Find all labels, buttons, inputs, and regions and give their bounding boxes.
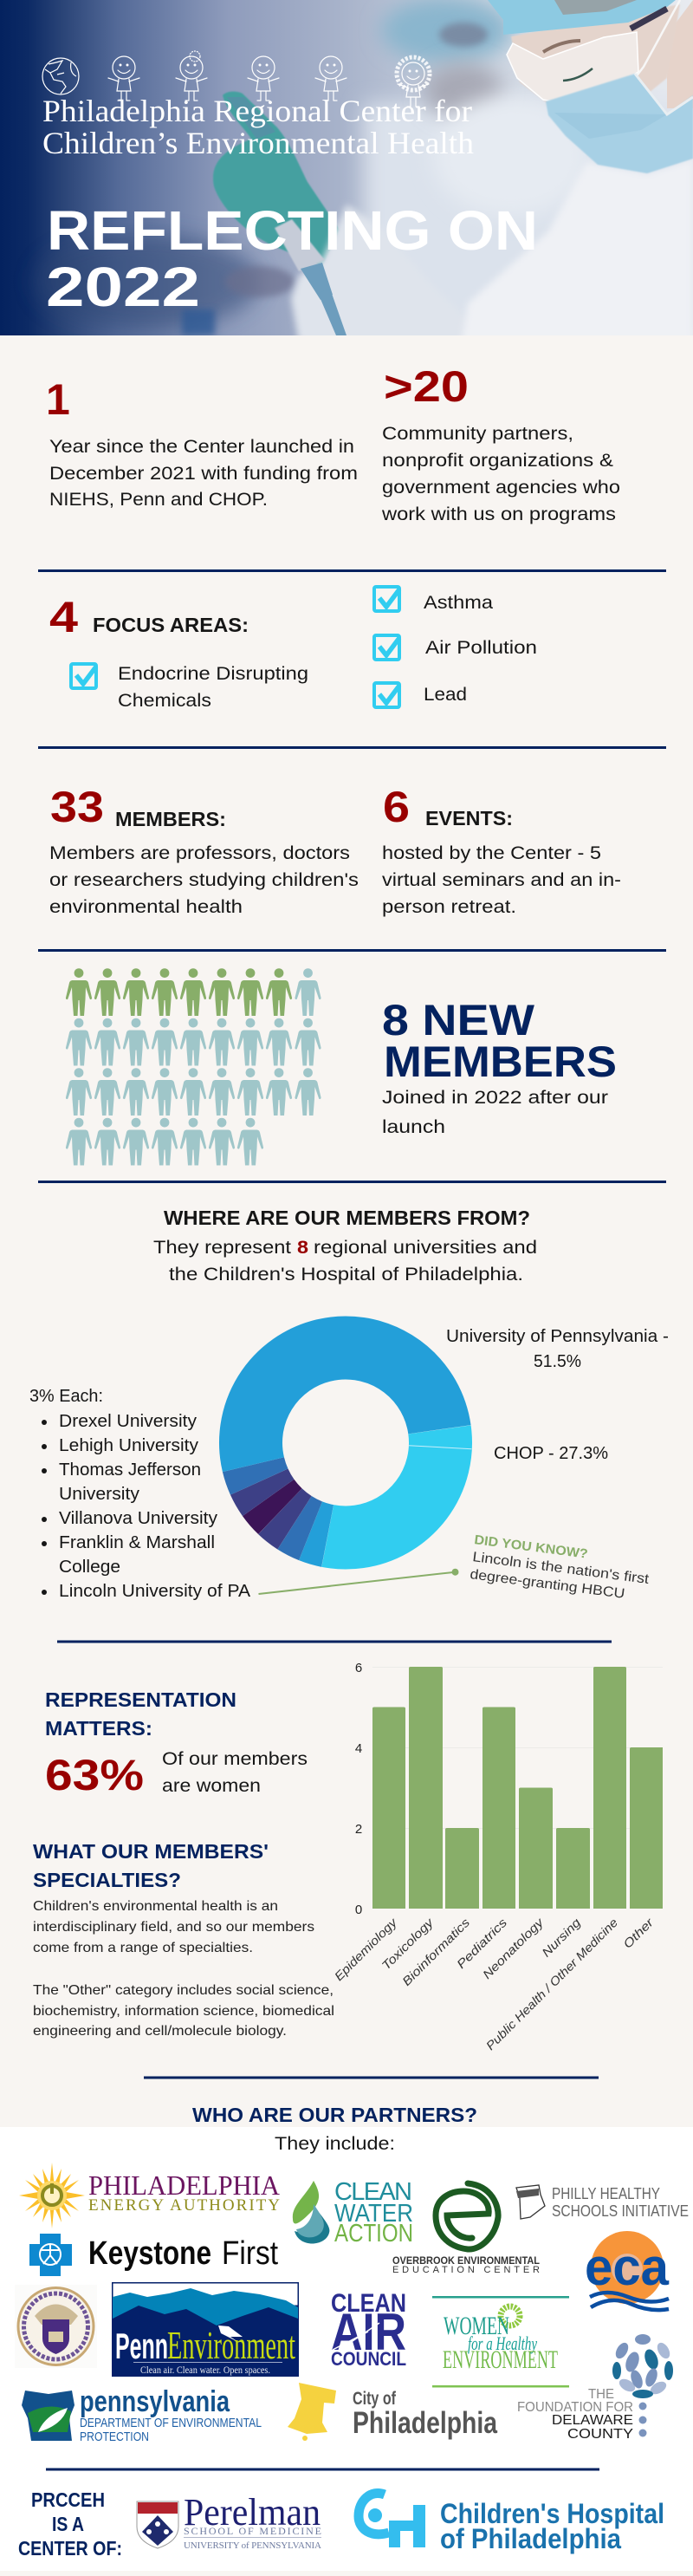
- logo: Clean Air Council: CLEAN: [331, 2289, 406, 2318]
- bar chart: member specialties: Bioinformatics: [399, 1916, 472, 1988]
- stat: 1 year: December 2021 with funding from: [49, 464, 358, 484]
- stat: more than 20 partners: [381, 362, 620, 524]
- heading: who are our partners: WHO ARE OUR PARTNERS?: [192, 2104, 477, 2126]
- specialties text: come from a range of specialties.: [33, 1941, 253, 1955]
- logo: Women for a Healthy Environment: ENVIRONMENT: [443, 2345, 558, 2374]
- logo: Foundation for Delaware County: COUNTY: [567, 2427, 633, 2442]
- bar chart: member specialties: Other: [620, 1915, 657, 1951]
- donut labels: Penn and CHOP: [446, 1327, 669, 1463]
- center name: [43, 99, 473, 154]
- logo: Philly Healthy Schools Initiative: [516, 2185, 689, 2220]
- focus areas: [49, 587, 537, 711]
- donut labels: 3% each list: College: [59, 1558, 120, 1577]
- logo: Foundation for Delaware County: THE: [588, 2387, 614, 2402]
- logo: Perelman School of Medicine: SCHOOL OF MEDICINE: [184, 2525, 321, 2537]
- representation stat: [45, 1688, 308, 1799]
- logo: Children's Hospital of Philadelphia: [359, 2494, 664, 2554]
- logo: Philadelphia Energy Authority: ENERGY AUTHORITY: [88, 2196, 280, 2215]
- logo: PennEnvironment: Clean air. Clean water. Open spaces.: [140, 2364, 270, 2376]
- heading: where are members from: WHERE ARE OUR MEMBERS FROM?: [164, 1207, 530, 1229]
- hero banner: [0, 0, 693, 342]
- specialties text: Children's environmental health is an: [33, 1899, 278, 1914]
- center name: Philadelphia Regional Center for: [42, 94, 472, 128]
- stat: 6 events: hosted by the Center - 5: [382, 843, 601, 863]
- focus areas: Air Pollution: [425, 638, 537, 658]
- callout: did you know: degree-granting HBCU: [469, 1567, 625, 1602]
- logo: City of Philadelphia: [288, 2383, 497, 2441]
- stat: 8 new members: MEMBERS: [384, 1038, 617, 1086]
- logo: Children's Hospital of Philadelphia: Children's Hospital: [440, 2498, 664, 2529]
- logo: City of Philadelphia: City of: [353, 2389, 397, 2409]
- logo: City of Philadelphia: Philadelphia: [353, 2406, 497, 2440]
- stat: more than 20 partners: nonprofit organizations &: [382, 451, 613, 471]
- focus areas: Lead: [424, 685, 467, 705]
- representation stat: REPRESENTATION: [45, 1688, 236, 1711]
- donut labels: 3% each list: 3% Each:: [29, 1387, 103, 1406]
- bar chart: member specialties: Nursing: [539, 1916, 583, 1960]
- logo: Pennsylvania DEP: DEPARTMENT OF ENVIRONMENTAL: [80, 2416, 262, 2430]
- stat: 1 year: [46, 375, 358, 510]
- logo: Overbrook Environmental Education Center: [392, 2183, 540, 2275]
- bar chart: member specialties: 4: [355, 1741, 362, 1756]
- footer label: PRCCEH is a center of: PRCCEH: [31, 2488, 105, 2511]
- stat: 6 events: virtual seminars and an in-: [382, 870, 621, 890]
- bar chart: member specialties: Neonatology: [480, 1915, 547, 1981]
- stat: 1 year: Year since the Center launched in: [49, 437, 354, 457]
- focus areas: FOCUS AREAS:: [93, 614, 249, 636]
- representation stat: 63%: [45, 1751, 144, 1799]
- stat: 33 members: [49, 783, 359, 917]
- representation stat: MATTERS:: [45, 1717, 152, 1740]
- logo: County of Delaware seal: [15, 2285, 97, 2368]
- logo: Women for a Healthy Environment: for a Healthy: [468, 2332, 537, 2354]
- logo: Clean Air Council: [331, 2289, 406, 2370]
- donut labels: Penn and CHOP: 51.5%: [534, 1352, 581, 1371]
- icon: globe: [42, 58, 79, 94]
- bar chart: member specialties: 6: [355, 1661, 362, 1675]
- stat: more than 20 partners: >20: [384, 362, 469, 411]
- stat: 8 new members: 8 NEW: [382, 996, 535, 1044]
- focus areas: Asthma: [424, 593, 493, 613]
- specialties text: [33, 1840, 334, 2039]
- title: [49, 211, 534, 307]
- stat: 6 events: EVENTS:: [425, 807, 513, 829]
- donut labels: 3% each list: Villanova University: [59, 1509, 217, 1528]
- donut labels: 3% each list: Franklin & Marshall: [59, 1533, 215, 1552]
- logo: Perelman School of Medicine: [137, 2491, 321, 2551]
- icon: check lead: [374, 683, 399, 707]
- donut labels: Penn and CHOP: University of Pennsylvania -: [446, 1327, 669, 1346]
- callout: did you know: Lincoln is the nation's first: [471, 1550, 651, 1587]
- stat: 33 members: Members are professors, doctors: [49, 843, 350, 863]
- stat: 8 new members: [382, 996, 617, 1137]
- donut labels: 3% each list: Drexel University: [59, 1412, 197, 1431]
- logo: Philadelphia Energy Authority: [19, 2163, 280, 2228]
- logo: Foundation for Delaware County: DELAWARE: [552, 2413, 633, 2428]
- logo: Keystone First: First: [222, 2235, 278, 2272]
- logo: Pennsylvania DEP: pennsylvania: [80, 2385, 230, 2418]
- heading: where are members from: 8: [297, 1238, 308, 1258]
- title: REFLECTING ON: [47, 199, 538, 262]
- logo: ECA: eca: [585, 2238, 670, 2296]
- logo: Clean Water Action: ACTION: [334, 2220, 413, 2247]
- callout: did you know: DID YOU KNOW?: [473, 1532, 589, 1562]
- logo: Clean Water Action: CLEAN: [334, 2178, 412, 2206]
- stat: 33 members: 33: [50, 783, 104, 831]
- stat: 8 new members: Joined in 2022 after our: [382, 1088, 608, 1108]
- partners panel: [0, 2127, 693, 2571]
- stat: 8 new members: launch: [382, 1117, 445, 1137]
- focus areas: Chemicals: [118, 691, 211, 711]
- stat: more than 20 partners: government agencies who: [382, 478, 620, 498]
- logo: Clean Water Action: [293, 2178, 413, 2247]
- logo: PennEnvironment: Penn: [115, 2326, 168, 2366]
- partners panel: They include:: [275, 2134, 395, 2154]
- stat: 1 year: NIEHS, Penn and CHOP.: [49, 490, 268, 510]
- bar chart: member specialties: Toxicology: [379, 1915, 437, 1973]
- logo: Keystone First: Keystone: [88, 2235, 211, 2272]
- stat: 33 members: environmental health: [49, 897, 243, 917]
- logo icons: globe and children: [42, 51, 430, 107]
- bar chart: member specialties: Pediatrics: [454, 1916, 509, 1971]
- representation stat: Of our members: [162, 1749, 308, 1769]
- specialties text: engineering and cell/molecule biology.: [33, 2024, 287, 2039]
- stat: 1 year: 1: [46, 375, 70, 424]
- stat: more than 20 partners: Community partners,: [382, 424, 573, 444]
- donut chart: [211, 1309, 480, 1577]
- donut labels: 3% each list: [29, 1387, 251, 1601]
- footer label: PRCCEH is a center of: IS A: [52, 2513, 84, 2535]
- logo: Perelman School of Medicine: Perelman: [184, 2491, 321, 2534]
- stat: 6 events: [382, 783, 621, 917]
- pictogram: members, 8 new highlighted: [66, 968, 321, 1165]
- focus areas: 4: [49, 593, 78, 641]
- logo: Philly Healthy Schools Initiative: PHILLY HEALTHY: [552, 2185, 660, 2202]
- heading: where are members from: regional universities and: [314, 1238, 537, 1258]
- bar chart: member specialties: 0: [355, 1903, 362, 1917]
- icon: check asthma: [374, 587, 399, 611]
- representation stat: are women: [162, 1776, 261, 1796]
- bar chart: member specialties: Epidemiology: [332, 1915, 400, 1983]
- heading: where are members from: the Children's Hospital of Philadelphia.: [169, 1265, 523, 1285]
- icon: check air pollution: [374, 635, 399, 660]
- logo: Pennsylvania DEP: [22, 2385, 262, 2444]
- bar chart: member specialties: [332, 1661, 663, 2052]
- donut labels: 3% each list: Lehigh University: [59, 1436, 198, 1455]
- logo: Women for a Healthy Environment: WOMEN: [444, 2312, 509, 2340]
- donut labels: 3% each list: Lincoln University of PA: [59, 1582, 251, 1601]
- logo: Perelman School of Medicine: UNIVERSITY of PENNSYLVANIA: [184, 2540, 321, 2551]
- logo: Women for a Healthy Environment: [432, 2296, 569, 2387]
- stat: 33 members: MEMBERS:: [115, 808, 226, 830]
- stat: more than 20 partners: work with us on programs: [381, 504, 616, 524]
- heading: where are members from: They represent: [153, 1238, 291, 1258]
- callout: did you know: [258, 1532, 651, 1602]
- icon: check endocrine: [71, 664, 96, 688]
- title: 2022: [46, 256, 200, 318]
- specialties text: biochemistry, information science, biomedical: [33, 2004, 334, 2019]
- focus areas: Endocrine Disrupting: [118, 664, 308, 684]
- footer label: PRCCEH is a center of: [18, 2488, 122, 2560]
- logo: Overbrook Environmental Education Center: OVERBROOK ENVIRONMENTAL: [392, 2254, 540, 2267]
- stat: 33 members: or researchers studying children's: [49, 870, 359, 890]
- donut labels: 3% each list: Thomas Jefferson: [59, 1460, 201, 1480]
- logo: Foundation for Delaware County: [517, 2334, 673, 2442]
- bar chart: member specialties: Public Health / Other Medicine: [483, 1916, 620, 2052]
- donut labels: 3% each list: University: [59, 1485, 139, 1504]
- stat: 6 events: person retreat.: [382, 897, 516, 917]
- bar chart: member specialties: 2: [355, 1822, 362, 1837]
- specialties text: interdisciplinary field, and so our members: [33, 1920, 314, 1935]
- logo: Clean Air Council: COUNCIL: [331, 2348, 406, 2370]
- logo: PennEnvironment: Environment: [167, 2323, 295, 2367]
- logo: Pennsylvania DEP: PROTECTION: [80, 2430, 149, 2444]
- center name: Children’s Environmental Health: [42, 126, 474, 160]
- photo: lab scientist with pipette: [0, 0, 693, 342]
- heading: where are members from: [153, 1207, 537, 1285]
- logo: Children's Hospital of Philadelphia: of Philadelphia: [440, 2523, 621, 2554]
- logo: Clean Water Action: WATER: [334, 2200, 413, 2228]
- logo: Philadelphia Energy Authority: PHILADELPHIA: [88, 2169, 280, 2201]
- specialties text: WHAT OUR MEMBERS': [33, 1840, 269, 1863]
- footer label: PRCCEH is a center of: CENTER OF:: [18, 2537, 122, 2560]
- stat: 6 events: 6: [383, 783, 410, 831]
- donut labels: Penn and CHOP: CHOP - 27.3%: [494, 1444, 608, 1463]
- logo: PennEnvironment: [112, 2282, 299, 2377]
- logo: Clean Air Council: AIR: [331, 2303, 406, 2361]
- specialties text: SPECIALTIES?: [33, 1869, 181, 1891]
- logo: Keystone First: [29, 2234, 278, 2276]
- specialties text: The "Other" category includes social science,: [33, 1983, 334, 1998]
- logo: Foundation for Delaware County: FOUNDATION FOR: [517, 2400, 633, 2415]
- logo: Overbrook Environmental Education Center: EDUCATION CENTER: [392, 2265, 540, 2275]
